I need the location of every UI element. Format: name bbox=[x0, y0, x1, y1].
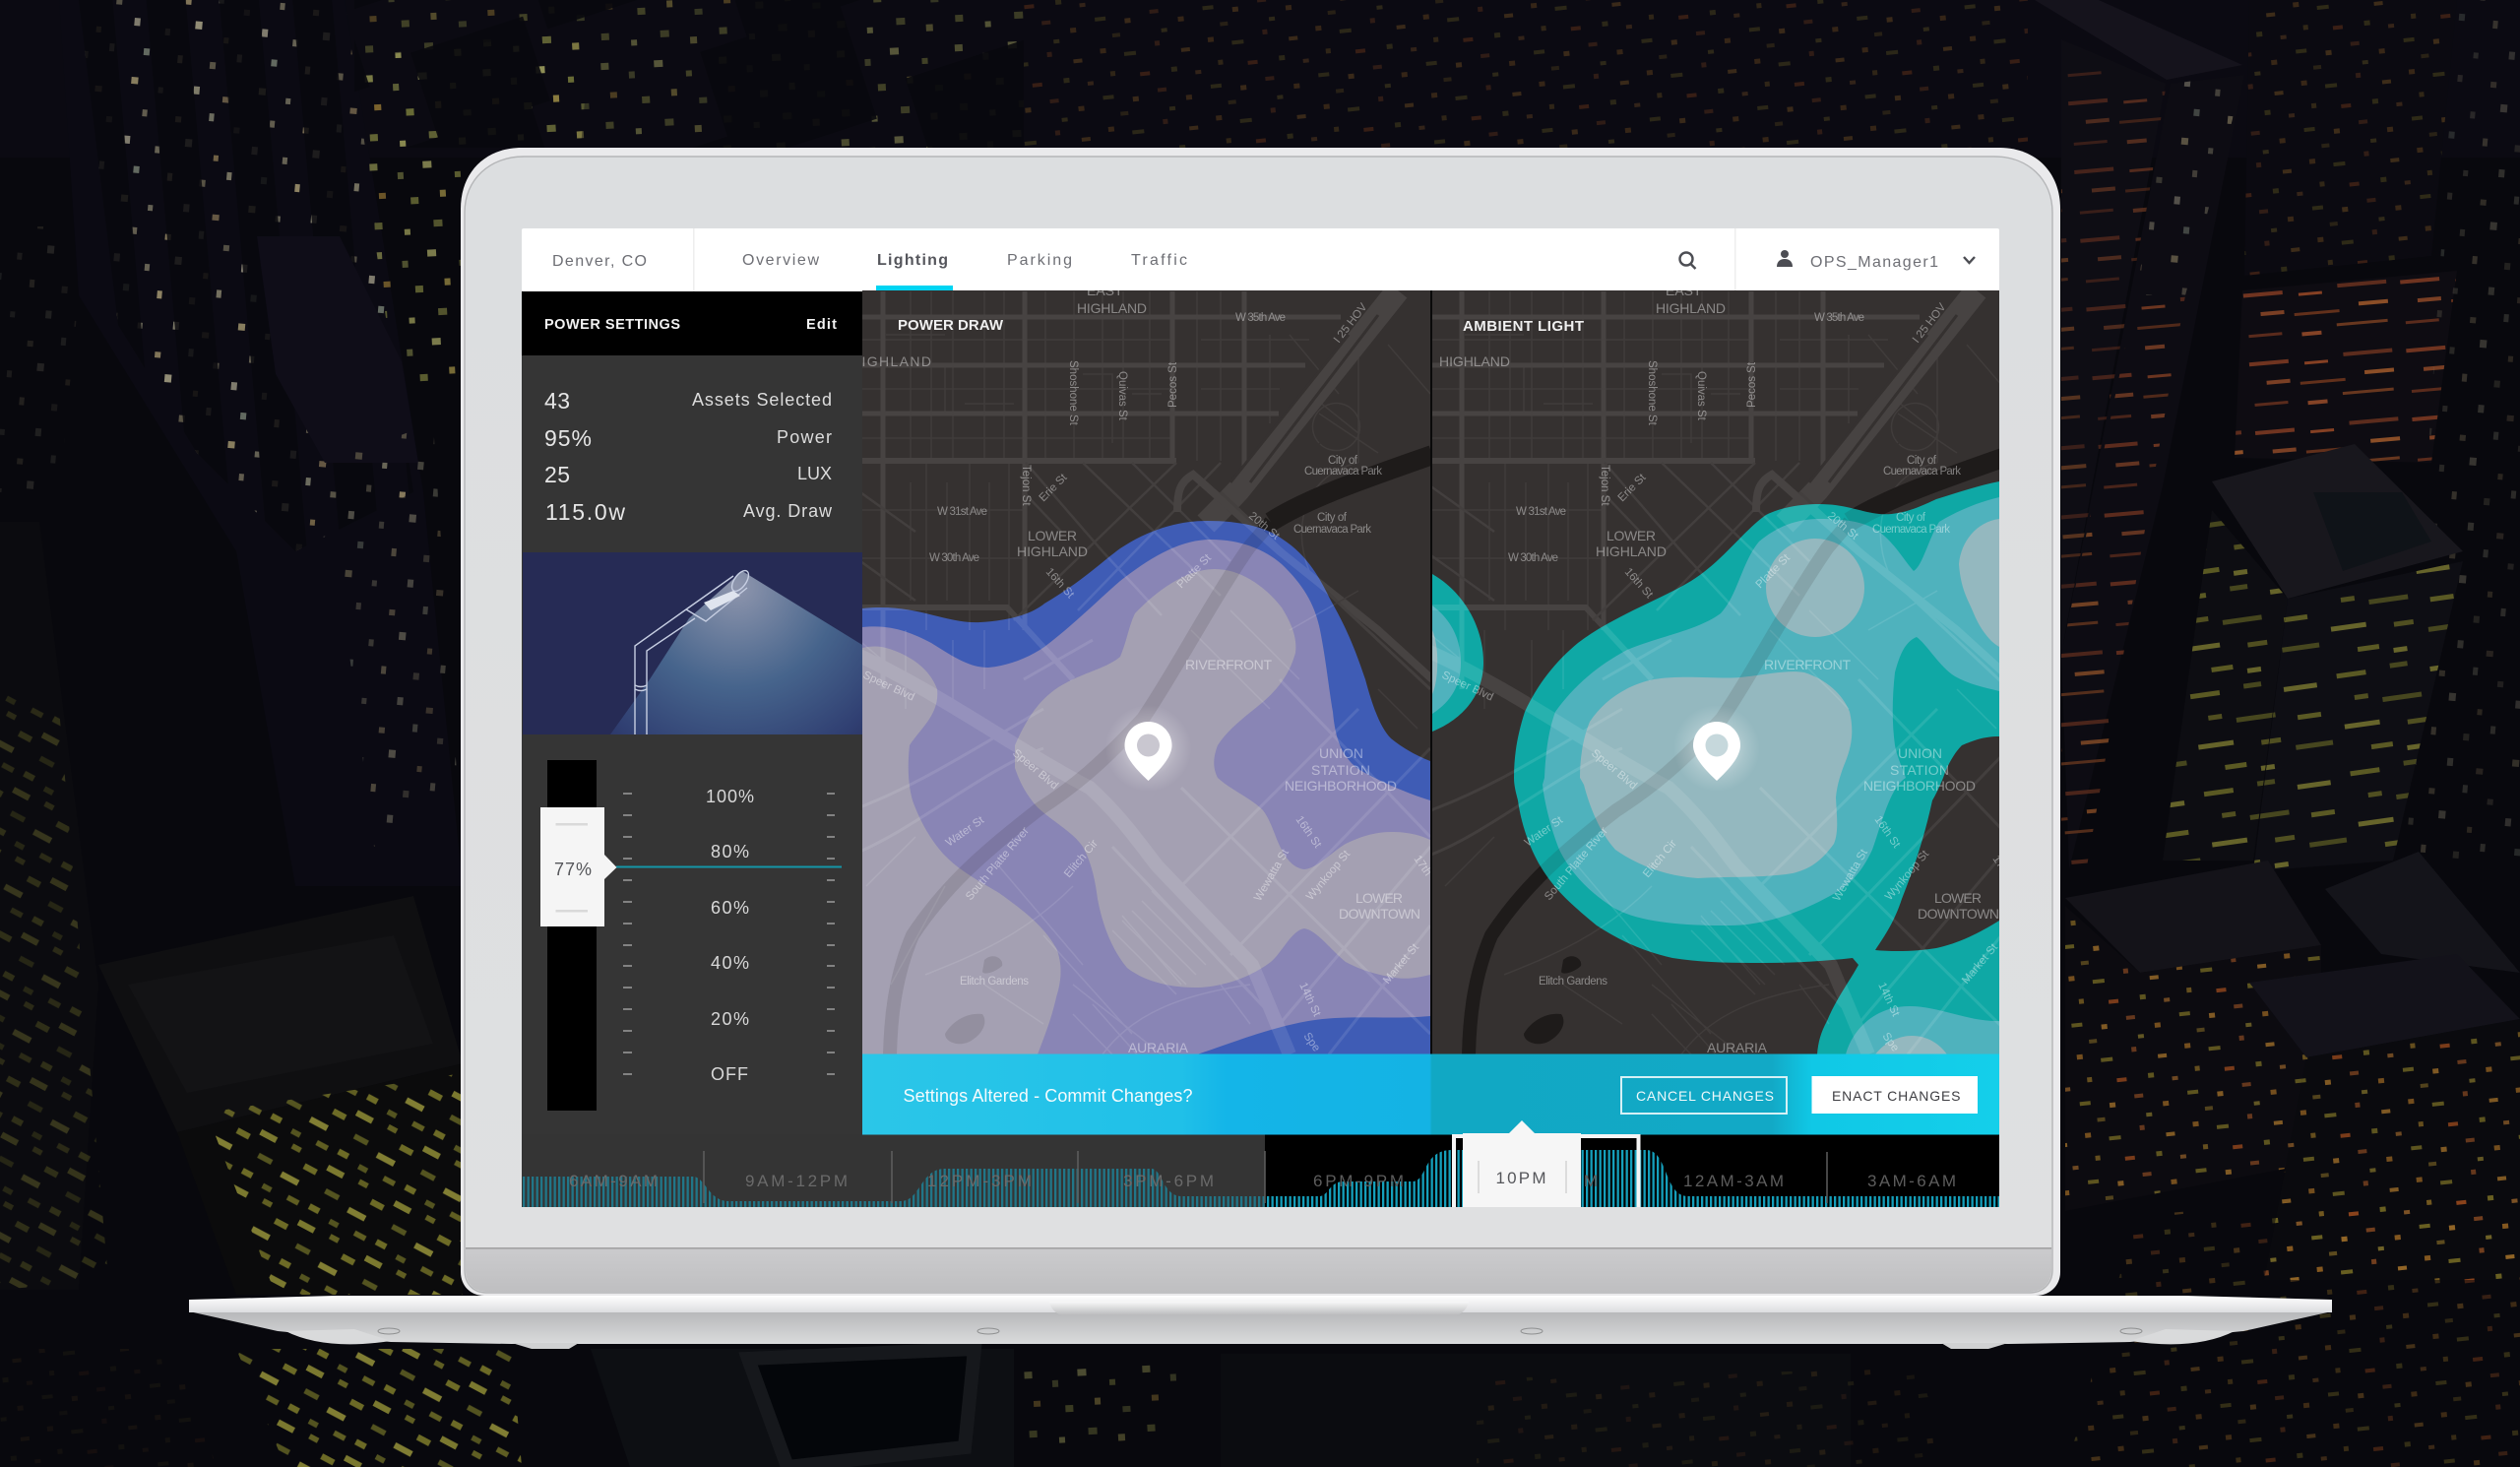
commit changes bar bbox=[862, 1053, 1999, 1134]
panel: power settings: POWER SETTINGS bbox=[544, 317, 680, 333]
map labels: power draw: Water St bbox=[944, 814, 987, 849]
navigation bar: Traffic bbox=[1131, 252, 1187, 269]
map labels: power draw: EAST bbox=[1087, 283, 1123, 298]
stat rows: 43 bbox=[544, 388, 570, 414]
navigation bar: OPS_Manager1 bbox=[1810, 254, 1938, 271]
map labels: ambient light: HIGHLAND bbox=[1596, 543, 1667, 559]
streets showing through heat zones bbox=[862, 521, 1430, 1053]
map labels: ambient light: 16th St bbox=[1622, 566, 1656, 602]
map labels: ambient light: AURARIA bbox=[1707, 1040, 1768, 1055]
scale labels: 60% bbox=[711, 898, 749, 918]
scale labels: 100% bbox=[706, 787, 754, 806]
navigation bar: Lighting bbox=[877, 252, 948, 269]
scale ticks bbox=[623, 794, 835, 1074]
hour labels: 6AM-9AM bbox=[569, 1172, 658, 1190]
map labels: power draw: City of bbox=[1328, 455, 1358, 467]
map labels: ambient light: Spe bbox=[1880, 1031, 1901, 1053]
icon: user bbox=[1777, 250, 1793, 267]
map labels: ambient light: Pecos St bbox=[1746, 361, 1758, 408]
map labels: power draw: Erie St bbox=[1038, 472, 1070, 504]
heat zone: middle lavender bbox=[862, 540, 1430, 1054]
map: power draw bbox=[847, 283, 1433, 1055]
map labels: power draw bbox=[850, 283, 1433, 1055]
map labels: power draw: Tejon St bbox=[1020, 465, 1032, 506]
scale labels: 20% bbox=[711, 1009, 749, 1029]
map labels: ambient light: W 30th Ave bbox=[1508, 552, 1558, 564]
hour labels: 3AM-6AM bbox=[1867, 1172, 1956, 1190]
map labels: ambient light: Shoshone St bbox=[1646, 360, 1658, 426]
navigation bar: Overview bbox=[742, 252, 819, 269]
map labels: ambient light: LOWER bbox=[1606, 528, 1656, 543]
map labels: ambient light: City of bbox=[1907, 455, 1937, 467]
scale labels: OFF bbox=[711, 1064, 748, 1084]
map labels: ambient light: Wewatta St bbox=[1831, 847, 1870, 904]
time selector: 10PM bbox=[1496, 1169, 1545, 1187]
map labels: power draw: South Platte River bbox=[964, 825, 1032, 903]
heat zone: bottom right inner bbox=[1875, 1036, 1947, 1054]
map labels: power draw: HIGHLAND bbox=[1077, 300, 1147, 316]
map labels: ambient light: Market St bbox=[1960, 941, 2000, 987]
map labels: power draw: Cuernavaca Park bbox=[1293, 524, 1371, 536]
map labels: ambient light: Speer Blvd bbox=[1440, 670, 1495, 703]
map labels: power draw: Cuernavaca Park bbox=[1304, 466, 1382, 478]
stat rows: 95% bbox=[544, 425, 592, 451]
map labels: ambient light: South Platte River bbox=[1543, 825, 1610, 903]
heat zone: inner right bbox=[1959, 519, 1999, 647]
map labels: power draw: 17th bbox=[1412, 854, 1433, 878]
map labels: power draw: 20th St bbox=[1246, 510, 1282, 542]
map labels: power draw: Quivas St bbox=[1116, 371, 1128, 421]
map labels: ambient light: NEIGHBORHOOD bbox=[1863, 778, 1976, 794]
map labels: power draw: Speer Blvd bbox=[1010, 747, 1060, 792]
map labels: power draw: Wewatta St bbox=[1252, 847, 1292, 904]
map labels: power draw: W 30th Ave bbox=[929, 552, 979, 564]
hour labels: 12PM-3PM bbox=[927, 1172, 1032, 1190]
map: ambient light bbox=[1425, 283, 2012, 1055]
laptop lid bbox=[461, 148, 2060, 1296]
stat rows: Power bbox=[777, 427, 832, 447]
map labels: ambient light: 14th St bbox=[1875, 981, 1902, 1019]
stat rows: 115.0w bbox=[545, 499, 625, 525]
icon: location pin bbox=[1111, 711, 1184, 784]
map labels: ambient light: Cuernavaca Park bbox=[1872, 524, 1950, 536]
commit changes bar: Settings Altered - Commit Changes? bbox=[904, 1086, 1193, 1106]
map labels: power draw: 14th St bbox=[1296, 981, 1323, 1019]
map labels: ambient light: Quivas St bbox=[1695, 371, 1707, 421]
hour dividers bbox=[704, 1151, 1827, 1203]
map labels: ambient light: W 31st Ave bbox=[1516, 506, 1566, 518]
hour labels: 3PM-6PM bbox=[1123, 1172, 1214, 1190]
map title: POWER DRAW bbox=[898, 317, 1004, 334]
timeline bbox=[522, 1120, 1999, 1207]
map labels: ambient light: DOWNTOWN bbox=[1918, 906, 1999, 922]
heat zone: left lobe outer bbox=[1432, 574, 1483, 732]
heat zone: inner circle bbox=[1766, 539, 1864, 637]
hour labels: 12AM-3AM bbox=[1683, 1172, 1784, 1190]
button: cancel changes bbox=[1621, 1077, 1787, 1114]
slider handle: 77% bbox=[554, 860, 592, 879]
map labels: power draw: UNION bbox=[1319, 745, 1363, 761]
map labels: power draw: Elitch Cir bbox=[1062, 838, 1101, 880]
stat rows: 25 bbox=[544, 462, 570, 487]
map labels: ambient light: Cuernavaca Park bbox=[1883, 466, 1961, 478]
heat zone: middle teal bbox=[1543, 497, 1999, 925]
stat rows bbox=[544, 388, 833, 525]
map labels: ambient light: Speer Blvd bbox=[1589, 747, 1639, 792]
screen dashboard bbox=[522, 228, 2012, 1207]
map labels: ambient light: Wynkoop St bbox=[1883, 848, 1932, 903]
panel: power settings: Edit bbox=[806, 317, 837, 333]
map labels: power draw: HIGHLAND bbox=[1017, 543, 1088, 559]
hour labels bbox=[569, 1172, 1956, 1190]
heat zone: inner lobes bbox=[862, 646, 1061, 1054]
map labels: ambient light: 17th bbox=[1990, 854, 2012, 878]
button: enact changes: ENACT CHANGES bbox=[1832, 1088, 1961, 1104]
map labels: ambient light: LOWER bbox=[1934, 890, 1982, 906]
map labels: ambient light: EAST bbox=[1666, 283, 1702, 298]
stat rows: Assets Selected bbox=[692, 390, 832, 410]
map labels: power draw: DOWNTOWN bbox=[1339, 906, 1420, 922]
stat rows: Avg. Draw bbox=[743, 501, 833, 521]
map divider bbox=[1430, 290, 1433, 1054]
map labels: ambient light: Platte St bbox=[1754, 551, 1793, 591]
map labels: ambient light: HIGHLAND bbox=[1439, 353, 1510, 369]
map labels: ambient light: 16th St bbox=[1872, 814, 1903, 851]
map labels: power draw: NEIGHBORHOOD bbox=[1285, 778, 1397, 794]
stat rows: LUX bbox=[797, 464, 832, 483]
map labels: power draw: LOWER bbox=[1028, 528, 1077, 543]
map labels: power draw: 16th St bbox=[1293, 814, 1324, 851]
button: enact changes bbox=[1811, 1076, 1978, 1114]
map labels: power draw: 16th St bbox=[1043, 566, 1077, 602]
map labels: power draw: City of bbox=[1317, 512, 1348, 524]
waveform bbox=[522, 1150, 1999, 1207]
map labels: power draw: RIVERFRONT bbox=[1185, 657, 1272, 672]
map labels: ambient light: RIVERFRONT bbox=[1764, 657, 1851, 672]
heat zone: outer blue bbox=[862, 521, 1430, 1054]
map labels: power draw: Shoshone St bbox=[1067, 360, 1079, 426]
map labels: power draw: Market St bbox=[1381, 941, 1421, 987]
map labels: power draw: I 25 HOV bbox=[1332, 301, 1370, 346]
map labels: power draw: W 35th Ave bbox=[1235, 312, 1286, 324]
lamp illustration bbox=[522, 552, 862, 734]
time selector bbox=[1454, 1120, 1638, 1207]
map labels: power draw: Spe bbox=[1301, 1031, 1322, 1053]
hour labels: 9PM-12AM bbox=[1495, 1172, 1598, 1190]
map labels: ambient light bbox=[1439, 283, 2012, 1055]
map labels: power draw: W 31st Ave bbox=[937, 506, 987, 518]
map labels: ambient light: UNION bbox=[1898, 745, 1942, 761]
scale labels: 40% bbox=[711, 953, 749, 973]
scale labels: 80% bbox=[711, 842, 749, 861]
hour labels: 9AM-12PM bbox=[745, 1172, 848, 1190]
map labels: power draw: Pecos St bbox=[1167, 361, 1179, 408]
heat zone: left lobe inner bbox=[1432, 630, 1437, 694]
heat zone: inner main bbox=[1580, 671, 1852, 878]
streets showing through heat zones bbox=[1432, 504, 1999, 1053]
map labels: ambient light: Water St bbox=[1523, 814, 1566, 849]
navigation bar: Parking bbox=[1007, 252, 1072, 269]
heat zone: bottom right bbox=[1846, 1006, 1999, 1054]
slider track bbox=[547, 760, 597, 1111]
heat zone: outer teal bbox=[1514, 481, 1999, 1054]
map labels: ambient light: Elitch Cir bbox=[1641, 838, 1679, 880]
map labels: ambient light: W 35th Ave bbox=[1814, 312, 1864, 324]
map labels: power draw: HIGHLAND bbox=[850, 353, 931, 369]
heat zone: left lobe middle bbox=[1432, 606, 1461, 714]
button: cancel changes: CANCEL CHANGES bbox=[1636, 1088, 1774, 1104]
map labels: power draw: STATION bbox=[1311, 762, 1370, 778]
map labels: ambient light: Elitch Gardens bbox=[1539, 976, 1607, 988]
map labels: power draw: Speer Blvd bbox=[861, 670, 916, 703]
map labels: ambient light: HIGHLAND bbox=[1656, 300, 1726, 316]
map labels: ambient light: Tejon St bbox=[1599, 465, 1610, 506]
dim overlay on past hours bbox=[522, 1134, 1265, 1207]
map labels: ambient light: I 25 HOV bbox=[1911, 301, 1949, 346]
map labels: ambient light: Erie St bbox=[1616, 472, 1649, 504]
hour labels: 6PM-9PM bbox=[1313, 1172, 1404, 1190]
icon: chevron bbox=[1964, 257, 1975, 263]
map labels: power draw: Elitch Gardens bbox=[960, 976, 1029, 988]
laptop base bbox=[189, 1296, 2332, 1349]
map labels: power draw: Platte St bbox=[1175, 551, 1214, 591]
navigation bar: Denver, CO bbox=[552, 253, 647, 270]
scale labels bbox=[706, 787, 754, 1084]
panel: power settings bbox=[522, 291, 862, 1135]
navigation bar bbox=[522, 228, 1999, 291]
map labels: power draw: LOWER bbox=[1355, 890, 1403, 906]
icon: location pin bbox=[1679, 711, 1753, 785]
slider handle bbox=[540, 807, 616, 926]
map labels: power draw: AURARIA bbox=[1128, 1040, 1189, 1055]
map labels: ambient light: City of bbox=[1896, 512, 1926, 524]
level line bbox=[616, 866, 842, 868]
map labels: power draw: Wynkoop St bbox=[1304, 848, 1354, 903]
map title: AMBIENT LIGHT bbox=[1463, 318, 1584, 335]
icon: search bbox=[1679, 252, 1695, 269]
map labels: ambient light: STATION bbox=[1890, 762, 1949, 778]
map labels: ambient light: 20th St bbox=[1825, 510, 1860, 542]
